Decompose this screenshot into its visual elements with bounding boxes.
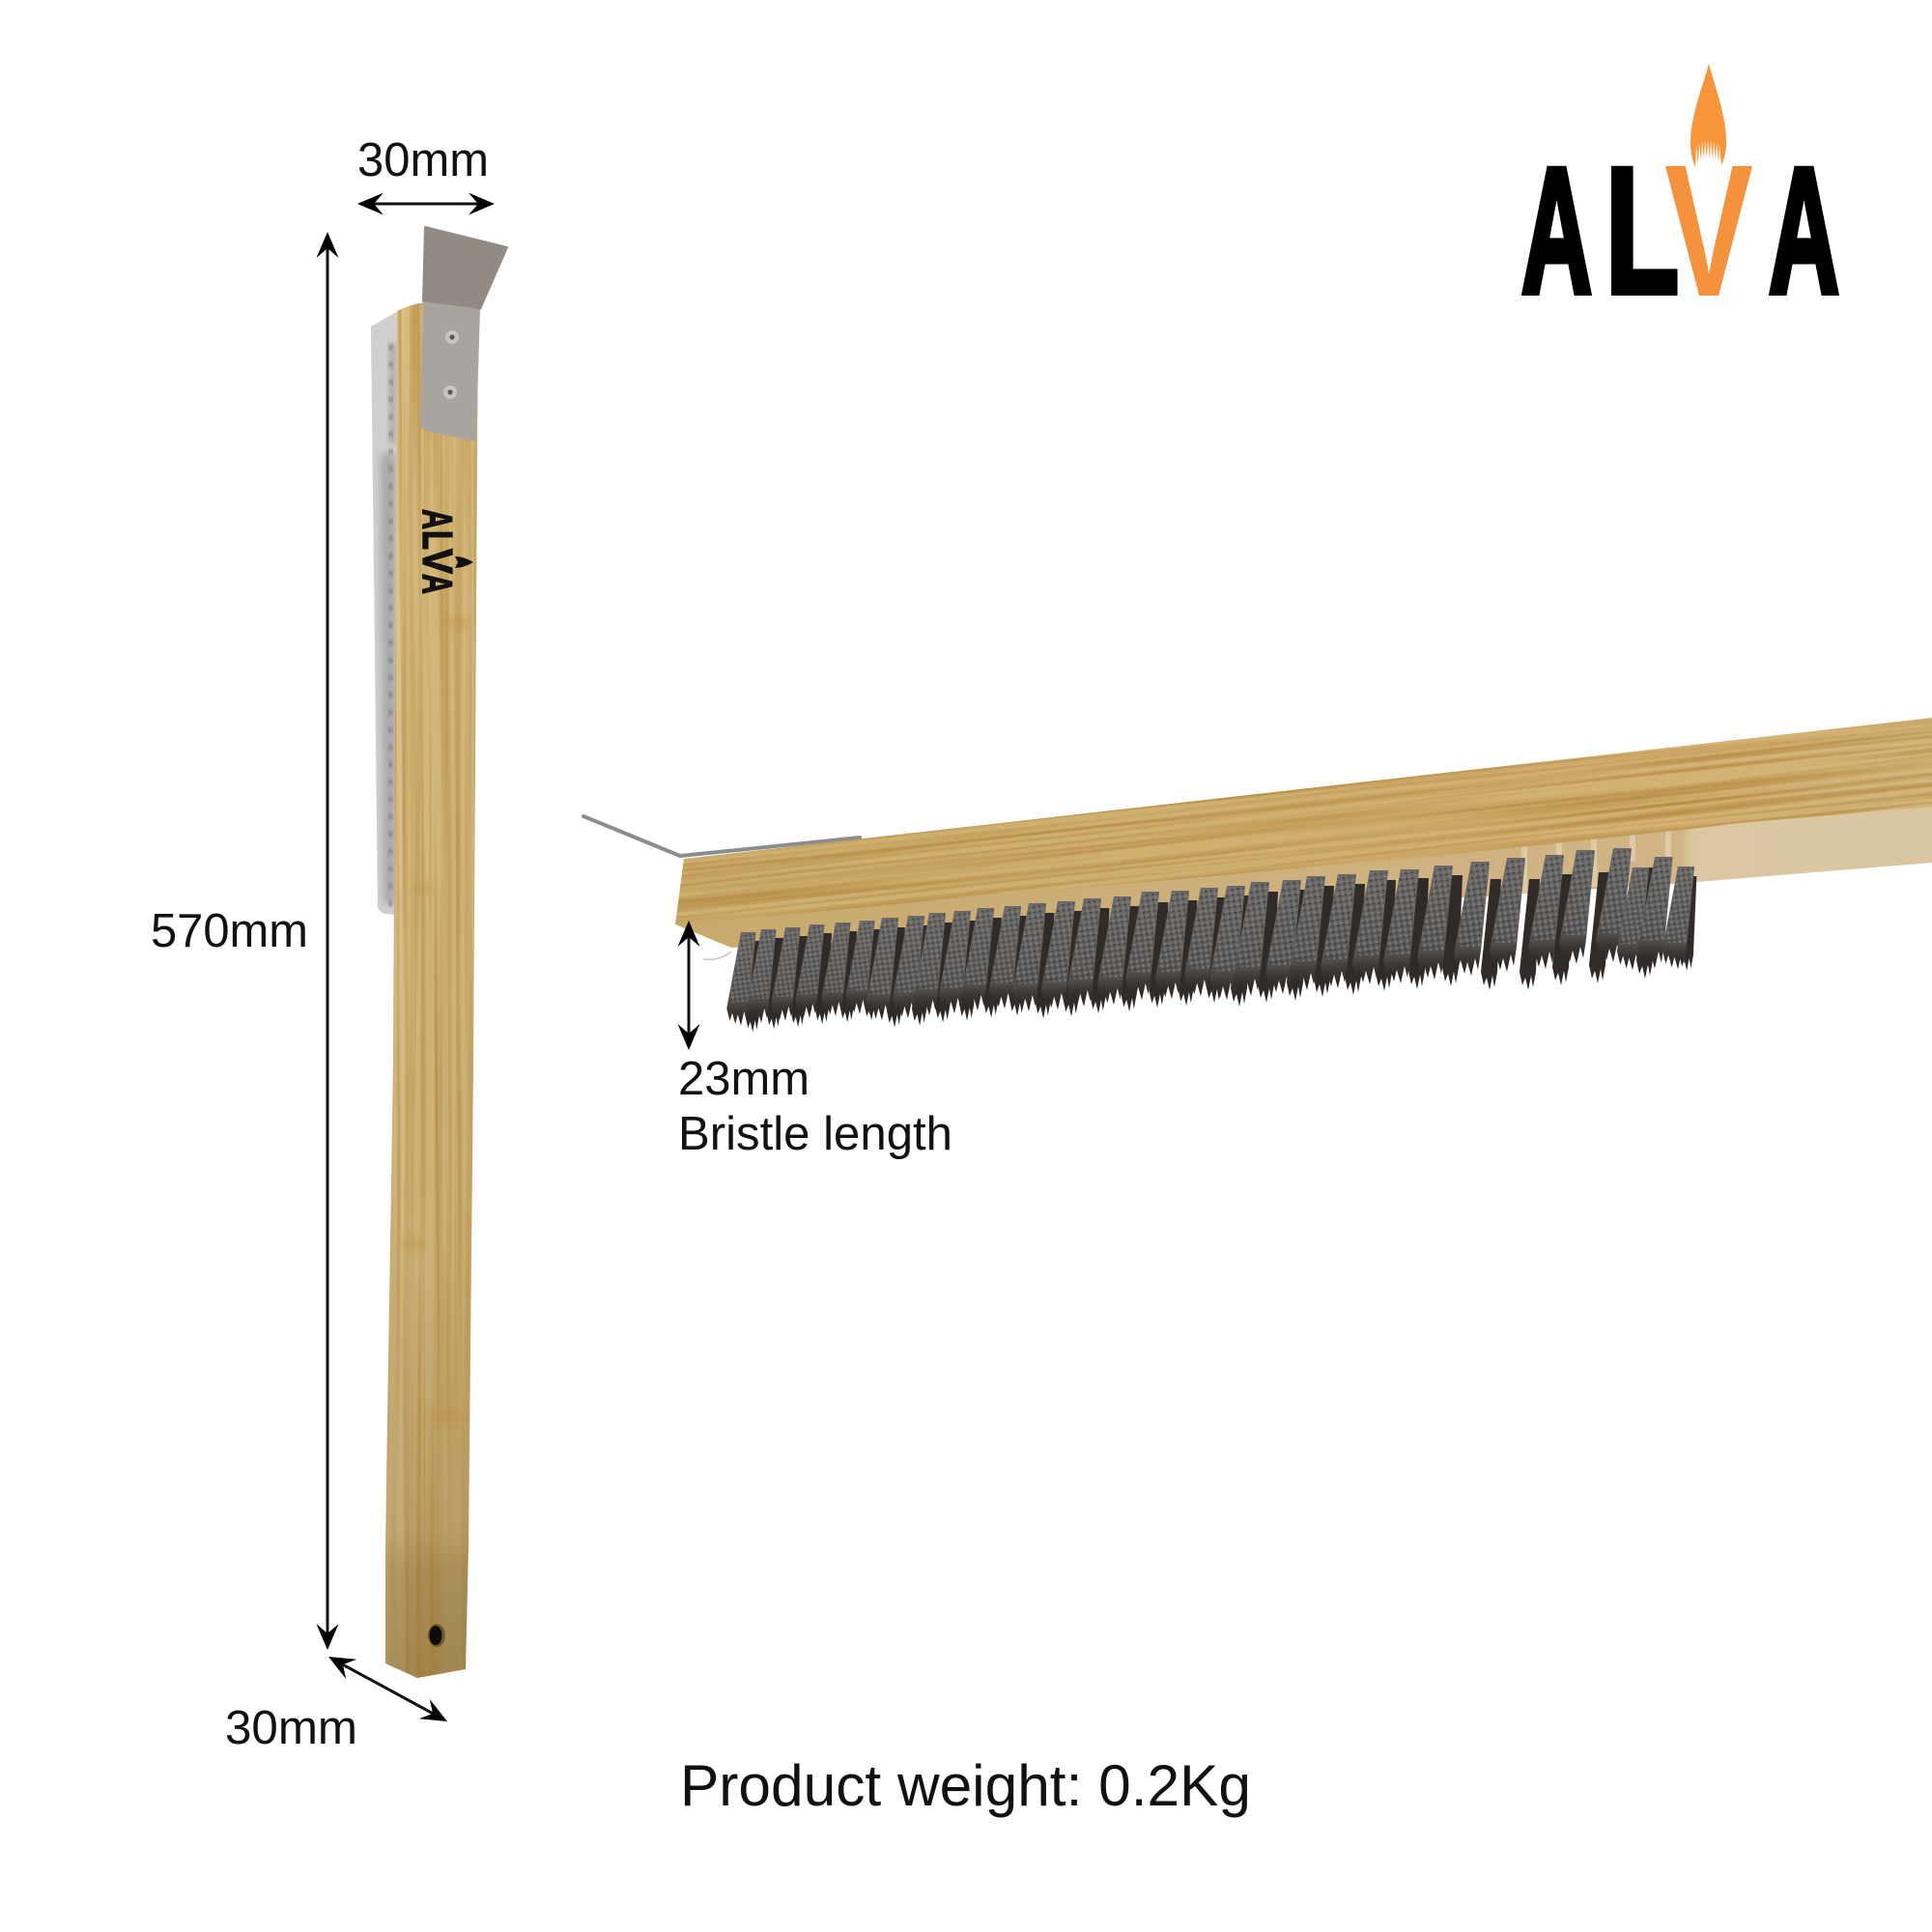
metal plate edge [583,816,860,856]
handle logo: L [413,530,461,550]
dimension arrow: width at top [357,193,495,214]
icon: screw [445,330,459,344]
beam front face [675,718,1932,924]
handle logo [413,509,473,594]
beam underside [675,773,1932,948]
dimension arrow: bristle length [678,921,699,1050]
handle logo: A [413,574,461,594]
product: brush head close-up [583,610,1932,1032]
icon: flame [1690,64,1726,167]
brush back plate and bristles [371,311,398,915]
bamboo nodes [401,617,472,1423]
wordmark: A [1769,131,1839,330]
product: brush side view [371,227,507,1678]
handle logo: A [413,509,461,529]
brand logo [1521,64,1839,336]
label: handle depth: 30mm [225,1702,357,1754]
icon: screw [443,385,457,399]
metal scraper blade [420,227,507,440]
pale stripes on underside [1524,826,1668,894]
label: bristle length: 23mm [678,1053,810,1105]
label: top width: 30mm [357,134,489,186]
wordmark: L [1605,131,1679,330]
bristles: back row [746,867,1696,1032]
handle logo: V [413,549,461,575]
label: bristle length: Bristle length [678,1108,952,1160]
bamboo handle [385,302,478,1678]
label: length: 570mm [151,905,308,957]
wordmark: A [1521,131,1592,330]
dimension arrow: length [317,232,338,1650]
bristles: front row [726,848,1694,1026]
label: bristle length [678,1053,952,1160]
label: product weight: Product weight: 0.2Kg [680,1753,1251,1818]
wordmark: V [1664,126,1753,336]
dimension arrow: handle depth [328,1657,447,1721]
icon: handle hole [428,1624,445,1647]
